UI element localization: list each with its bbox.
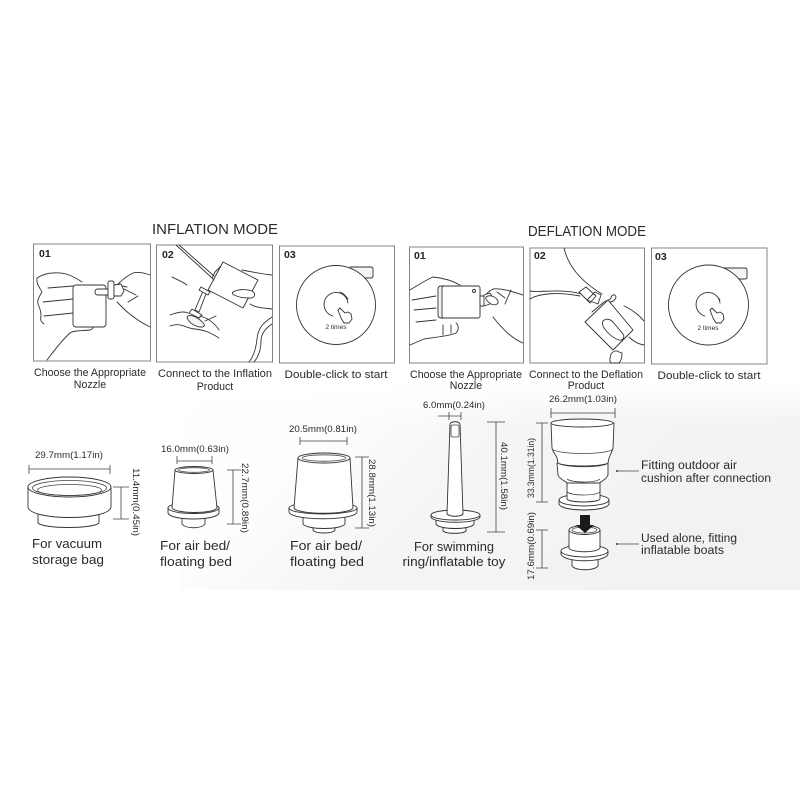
icon: pump deflating a product (530, 248, 644, 363)
label: air bed large line 2: floating bed (290, 554, 364, 569)
panel: deflation step 01: 01 (414, 250, 426, 262)
dimension: height 17.6mm: 17.6mm(0.69in) (526, 512, 536, 580)
panel: inflation step 01 (34, 244, 150, 361)
caption: inflation step 02 line 2: Product (197, 381, 233, 393)
heading: inflation mode: INFLATION MODE (152, 222, 278, 238)
caption: inflation step 03: Double-click to start (284, 369, 388, 381)
icon: pump connected to inflatable product (170, 245, 272, 362)
icon: hands holding pump and nozzle (410, 277, 523, 345)
icon: pump button with double-click hand: 2 times (326, 324, 347, 331)
nozzle: air bed small (161, 444, 250, 533)
dimension: width 20.5mm: 20.5mm(0.81in) (289, 424, 357, 434)
label: air bed small line 2: floating bed (160, 554, 232, 569)
panel: inflation step 01: 01 (39, 248, 51, 260)
panel: deflation step 03: 03 (655, 251, 667, 263)
caption: deflation step 01 line 2: Nozzle (450, 380, 482, 392)
dimension: height 33.3mm: 33.3mm(1.31in) (526, 438, 536, 498)
label: air bed large: For air bed/ (290, 538, 362, 553)
dimension: width 26.2mm: 26.2mm(1.03in) (549, 394, 617, 404)
caption: deflation step 02: Connect to the Deflation (529, 369, 643, 381)
panel: inflation step 03 (280, 246, 394, 363)
arrow: assembly direction (576, 515, 594, 533)
heading: deflation mode: DEFLATION MODE (528, 224, 646, 240)
caption: deflation step 03: Double-click to start (658, 370, 761, 382)
caption: deflation step 01: Choose the Appropriate (410, 369, 522, 381)
callout: inflatable boats (616, 533, 737, 557)
callout: outdoor air cushion (616, 460, 771, 485)
label: vacuum storage bag line 2: storage bag (32, 552, 104, 567)
callout: inflatable boats: inflatable boats (641, 545, 724, 557)
dimension: height 40.1mm: 40.1mm(1.58in) (499, 442, 509, 510)
callout: outdoor air cushion: cushion after connection (641, 473, 771, 485)
dimension: height 11.4mm: 11.4mm(0.45in) (131, 468, 141, 536)
icon: hands holding pump and nozzle (37, 272, 150, 360)
label: swimming ring line 2: ring/inflatable toy (402, 554, 506, 569)
panel: inflation step 02: 02 (162, 249, 174, 261)
nozzle: vacuum storage bag (28, 450, 141, 536)
dimension: width 16.0mm: 16.0mm(0.63in) (161, 444, 229, 454)
nozzle: air bed large (289, 424, 377, 533)
panel: inflation step 02 (156, 245, 272, 362)
dimension: width 29.7mm: 29.7mm(1.17in) (35, 450, 103, 460)
icon: pump button with double-click hand: 2 times (698, 325, 719, 332)
panel: deflation step 02 (530, 248, 644, 363)
nozzle: inflatable boats adapter (526, 512, 608, 580)
caption: deflation step 02 line 2: Product (568, 380, 604, 392)
panel: deflation step 01 (410, 247, 524, 363)
panel: inflation step 03: 03 (284, 249, 296, 261)
nozzle: swimming ring (423, 400, 509, 533)
callout: outdoor air cushion: Fitting outdoor air (641, 460, 737, 472)
caption: inflation step 01: Choose the Appropriate (34, 367, 146, 379)
dimension: height 22.7mm: 22.7mm(0.89in) (240, 463, 250, 533)
caption: inflation step 02: Connect to the Inflation (158, 368, 272, 380)
nozzle: outdoor air cushion adapter (526, 394, 617, 510)
dimension: height 28.8mm: 28.8mm(1.13in) (367, 459, 377, 527)
label: swimming ring: For swimming (414, 539, 494, 554)
label: vacuum storage bag: For vacuum (32, 536, 102, 551)
label: air bed small: For air bed/ (160, 538, 230, 553)
callout: inflatable boats: Used alone, fitting (641, 533, 737, 545)
dimension: width 6.0mm: 6.0mm(0.24in) (423, 400, 485, 410)
panel: deflation step 02: 02 (534, 250, 546, 262)
panel: deflation step 03 (652, 248, 767, 364)
caption: inflation step 01 line 2: Nozzle (74, 379, 106, 391)
